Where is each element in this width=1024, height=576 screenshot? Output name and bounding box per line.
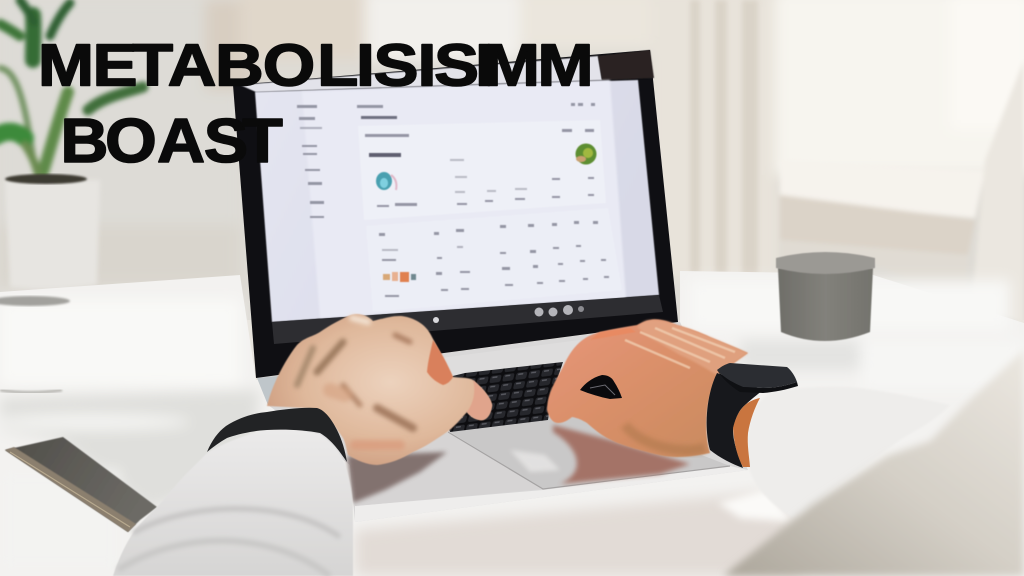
torso in foreground bbox=[723, 350, 1024, 576]
lid top right dark bezel bbox=[598, 50, 654, 80]
left hand bbox=[267, 314, 492, 465]
smart watch bbox=[707, 363, 798, 468]
curtain pleats bbox=[690, 0, 758, 280]
plant in white pot bbox=[0, 0, 143, 289]
title line: BOAST: BOAST bbox=[60, 106, 283, 176]
screen thumbnails bbox=[383, 272, 416, 282]
phone with metal edge bbox=[5, 437, 157, 532]
keyboard seen between fingers bbox=[580, 375, 622, 399]
laptop bbox=[233, 50, 748, 522]
laptop lid bbox=[233, 50, 678, 378]
laptop screen bbox=[255, 80, 663, 344]
title line: METABOLISISIMM: METABOLISISIMM bbox=[38, 33, 594, 99]
laptop base and keyboard deck bbox=[257, 322, 748, 522]
screen icon: blue globe bbox=[376, 172, 396, 190]
screen dock buttons bbox=[433, 305, 584, 323]
lid top bezel glare bbox=[240, 56, 602, 92]
right hand bbox=[547, 319, 748, 457]
title bbox=[38, 33, 594, 176]
white desk bbox=[0, 271, 1024, 576]
screen table panel bbox=[366, 208, 622, 312]
blurred screen labels bbox=[297, 103, 609, 297]
right white sleeve bbox=[748, 387, 950, 518]
screen icon: green avatar bbox=[576, 144, 596, 164]
desk highlight bbox=[718, 488, 792, 522]
window sill bbox=[780, 60, 1024, 325]
white tray on desk left bbox=[0, 296, 70, 392]
left white sleeve with black cuff bbox=[113, 408, 353, 576]
grey cup bbox=[776, 252, 875, 341]
keyboard bbox=[420, 362, 563, 432]
screen content panel bbox=[358, 120, 606, 220]
silver strip above keyboard bbox=[440, 340, 590, 378]
background: wall and curtains bbox=[0, 0, 1024, 325]
